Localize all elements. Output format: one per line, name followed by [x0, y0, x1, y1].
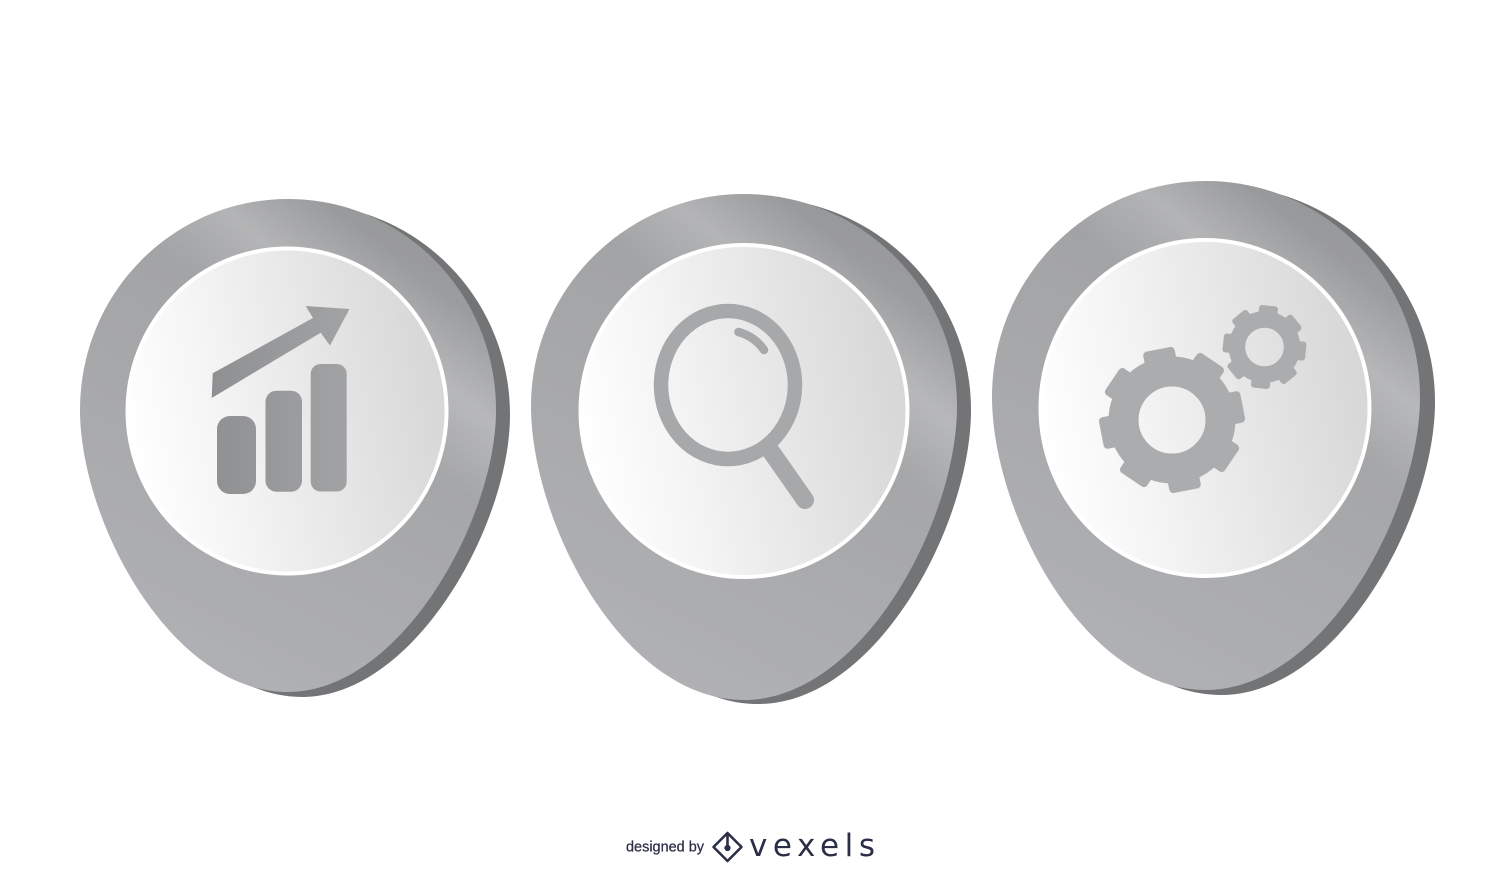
icon: magnifying glass: [661, 311, 805, 500]
vexels wordmark: vexels: [749, 828, 875, 864]
pin 1 shadow side: [94, 204, 510, 697]
pin: search: [531, 194, 971, 704]
icon: vexels diamond: [714, 833, 742, 861]
pin 1 highlight: [80, 199, 496, 692]
pin 2 disc: [580, 245, 908, 577]
pin 3 highlight: [992, 181, 1420, 690]
designed by label: designed by: [626, 840, 705, 856]
pin 1 face: [80, 199, 496, 692]
pin 3 shadow side: [1007, 186, 1435, 695]
pin 3 face: [992, 181, 1420, 690]
pin 1 disc: [128, 248, 446, 574]
pin: growth chart: [80, 199, 510, 697]
icon: bar chart with rising arrow: [212, 306, 350, 494]
large gear: [1098, 346, 1246, 494]
footer logo: [626, 828, 875, 864]
pin 2 highlight: [531, 194, 957, 700]
pin 2 shadow side: [545, 198, 971, 704]
icon: gears: [1098, 305, 1307, 494]
pin: settings: [992, 181, 1435, 695]
pin 3 disc: [1040, 240, 1370, 576]
pin 2 face: [531, 194, 957, 700]
small gear: [1222, 305, 1307, 389]
